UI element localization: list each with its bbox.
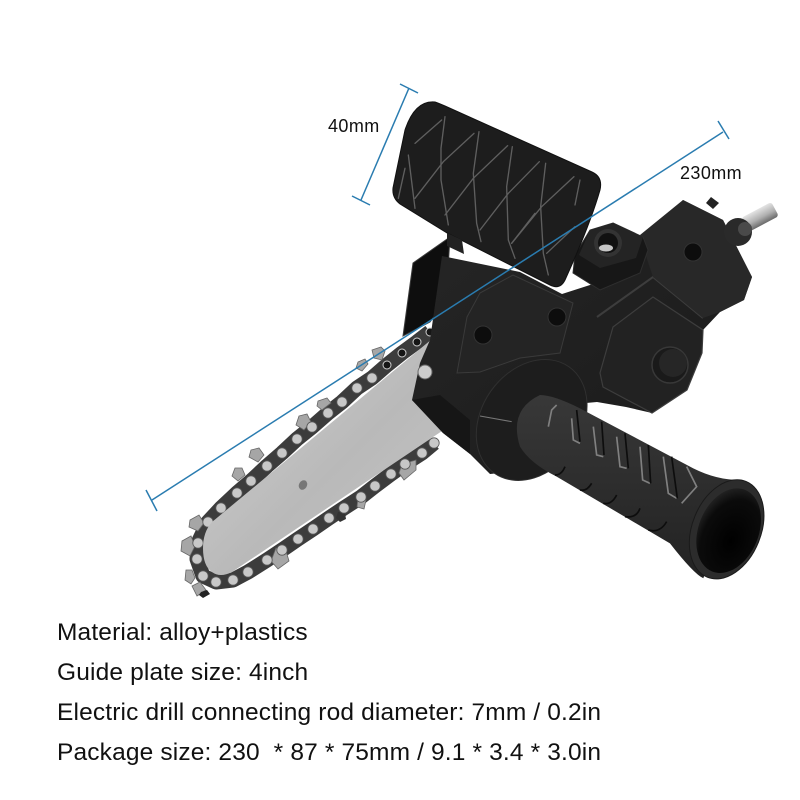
hex nut [573,223,648,290]
screws [451,243,702,426]
back plate [403,237,450,336]
spec: connecting rod diameter: Electric drill connecting rod diameter: 7mm / 0.2in [57,699,601,726]
handle flare rim [675,469,778,590]
saw chain [181,328,439,598]
chain cutter teeth [181,347,416,596]
rear gear housing [640,200,752,318]
handle bore [684,479,773,583]
spec: material: Material: alloy+plastics [57,619,308,646]
output shaft [706,197,779,246]
body collar ridge [597,277,703,318]
dimension line: 40mm [352,84,418,205]
bar bolt [418,365,432,379]
label: 230mm: 230mm [680,163,742,183]
dimension line: 230mm [146,121,729,511]
bar centre hole [297,479,309,491]
grip ribs [548,405,697,503]
handle grip [517,395,740,578]
pedal tread lines [398,117,580,275]
attachment body [412,200,752,474]
body left facet [457,275,573,373]
side handle [453,338,778,590]
spec: package size: Package size: 230 * 87 * 75mm / 9.1 * 3.4 * 3.0in [57,739,601,766]
label: 40mm: 40mm [328,116,380,136]
guide bar [203,339,442,575]
specification text block [57,619,601,766]
chain rivets [192,373,439,587]
pedal guard [393,102,601,287]
spec: guide plate size: Guide plate size: 4inch [57,659,308,686]
handle guard disc [453,338,610,502]
lower clamp [412,395,470,454]
body front cover [600,297,703,413]
cover button [652,347,688,383]
